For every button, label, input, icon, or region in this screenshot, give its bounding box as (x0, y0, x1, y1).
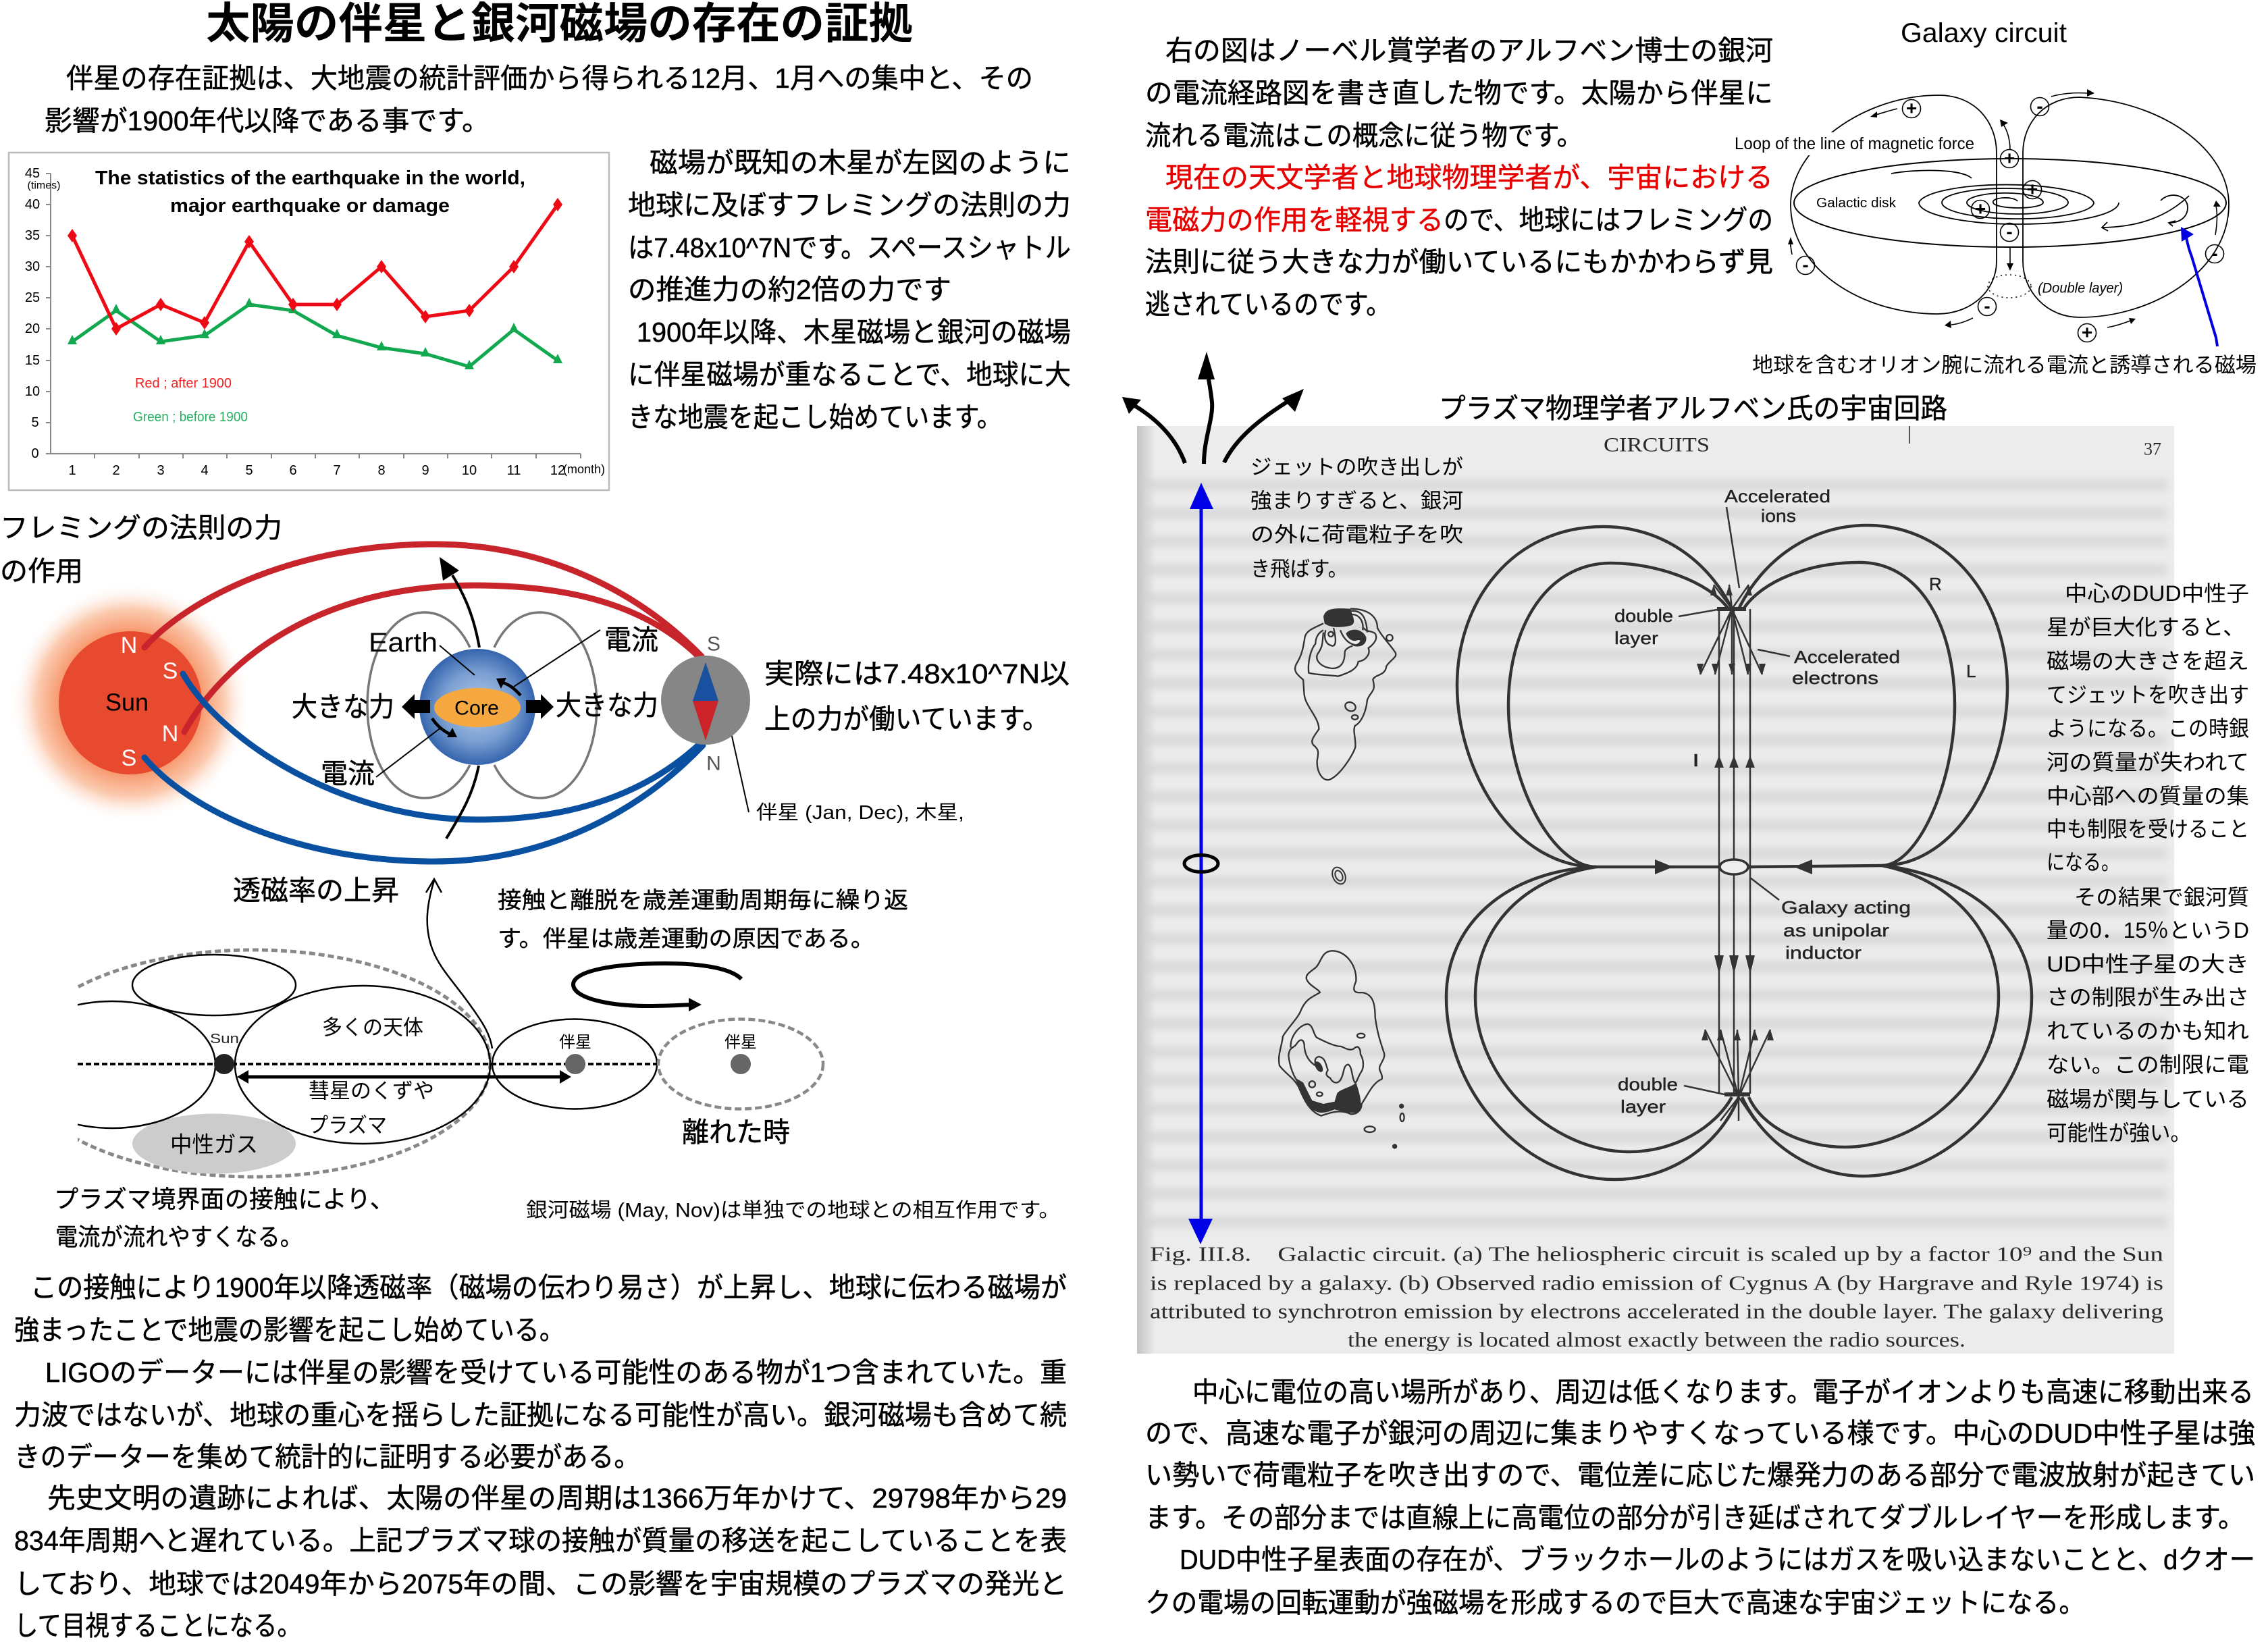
text block: DUD neutron star: さの制限が生み出さ (2047, 985, 2249, 1009)
heading: Alfven cosmic circuit: プラズマ物理学者アルフベン氏の宇宙回路 (1439, 393, 1947, 424)
callout: actual force: 上の力が働いています。 (764, 704, 1049, 735)
x axis labels: 7 (333, 463, 341, 478)
x axis labels: 9 (421, 463, 429, 478)
Sun with glow: N (121, 633, 137, 658)
axis dashed line (78, 1063, 657, 1065)
book header: 37 (2144, 439, 2161, 459)
x axis labels: 10 (462, 463, 477, 478)
double layer dotted ellipse (1988, 275, 2031, 298)
companion dots: 伴星 (559, 1033, 591, 1052)
distance double arrow (237, 1070, 571, 1084)
hand-lettered labels: L (1966, 661, 1976, 681)
figure caption (1150, 1242, 2164, 1352)
x axis labels: (month) (563, 462, 605, 476)
diagram labels: 電流 (321, 758, 375, 789)
callout: actual force: 実際には7.48x10^7N以 (764, 658, 1070, 689)
y axis labels: 40 (25, 197, 40, 212)
text block: lower right paragraphs: ます。その部分までは直線上に高電位の部分が引き延ばされてダブルレイヤーを形成します。 (1145, 1502, 2244, 1533)
figure caption: attributed to synchrotron emission by electrons accelerated in the double layer. The galaxy delivering (1150, 1299, 2163, 1323)
y axis labels: 45 (25, 166, 40, 181)
x axis labels: 2 (112, 463, 120, 478)
axis arrow through Earth (440, 557, 479, 839)
text block: Jupiter magnetic force: 地球に及ぼすフレミングの法則の力 (628, 190, 1071, 221)
text block: lower left paragraphs: 先史文明の遺跡によれば、太陽の伴星の周期は1366万年かけて、29798年から29 (47, 1483, 1067, 1514)
chart legend (133, 376, 248, 425)
heading: Fleming force (0, 512, 282, 587)
diagram: plasma spheres contact (9, 950, 823, 1177)
text block: Jupiter magnetic force: に伴星磁場が重なることで、地球に大 (628, 359, 1071, 390)
plasma lobes (9, 955, 657, 1144)
right lobe (2023, 97, 2229, 317)
diagram labels: 大きな力 (292, 691, 394, 722)
y axis labels: 25 (25, 290, 40, 305)
red magnetic arcs (144, 544, 702, 732)
text block: lower right paragraphs: い勢いで荷電粒子を吹き出すので、電位差に応じた爆発力のある部分で電波放射が起きてい (1145, 1460, 2255, 1491)
Sun dot (210, 1032, 239, 1074)
text block: Alfven current diagram explanation: 法則に従う大きな力が働いているにもかかわらず見 (1145, 246, 1773, 277)
x axis labels: 3 (157, 463, 165, 478)
hand-lettered labels: double (1614, 606, 1673, 626)
text block: Alfven current diagram explanation (1145, 35, 1773, 320)
text block: lower left paragraphs: しており、地球では2049年から2075年の間、この影響を宇宙規模のプラズマの発光と (14, 1568, 1067, 1599)
y axis labels: 30 (25, 259, 40, 274)
hand-lettered labels: I (1693, 750, 1698, 770)
diagram: galaxy circuit: - (2006, 221, 2013, 242)
Sun dot: Sun (210, 1032, 239, 1046)
circuit lobes (1446, 525, 2032, 1179)
green series (68, 298, 562, 369)
text block: Jupiter magnetic force: の推進力の約2倍の力です (628, 274, 951, 305)
radio source contour: upper (1295, 608, 1396, 780)
hand-lettered labels: inductor (1785, 943, 1862, 963)
neutral gas (132, 1114, 296, 1173)
diagram: galaxy circuit: - (2036, 96, 2043, 116)
galactic disk (1794, 159, 2226, 247)
diagram labels: (Double layer) (2038, 281, 2123, 296)
force arrows (402, 694, 554, 719)
text block: lower left paragraphs: 強まったことで地震の影響を起こし始めている。 (14, 1315, 564, 1346)
Sun with glow: Sun (105, 689, 149, 716)
radio source contour: small blob (1329, 865, 1348, 886)
text block: Alfven current diagram explanation: の電流経路図を書き直した物です。太陽から伴星に (1145, 78, 1773, 109)
diagram: galaxy circuit: + (2082, 321, 2092, 343)
caption: plasma boundary contact: 電流が流れやすくなる。 (55, 1223, 302, 1250)
text: contact and separation: す。伴星は歳差運動の原因である。 (498, 926, 874, 952)
text block: DUD neutron star: 可能性が強い。 (2047, 1121, 2191, 1145)
text block: lower right paragraphs: クの電場の回転運動が強磁場を形成するので巨大で高速な宇宙ジェットになる。 (1145, 1587, 2085, 1618)
panel: scanned book figure (1137, 426, 2174, 1354)
Sun with glow: N (162, 721, 178, 747)
inner labels: プラズマ (309, 1114, 387, 1137)
hand-lettered labels: layer (1614, 628, 1658, 648)
text block: Jupiter magnetic force (628, 147, 1071, 433)
text block: DUD neutron star: 中心部への質量の集 (2047, 784, 2249, 808)
text block: lower left paragraphs: 力波ではないが、地球の重心を揺らした証拠になる可能性が高い。銀河磁場も含めて続 (14, 1400, 1067, 1431)
blue magnetic arcs (144, 674, 703, 861)
neutral gas: 中性ガス (170, 1132, 258, 1157)
chart title (95, 167, 525, 217)
text block: lower left paragraphs (14, 1272, 1067, 1641)
companion star with compass: S (707, 633, 720, 655)
text block: DUD neutron star (2047, 581, 2249, 1145)
caption: plasma boundary contact (54, 1186, 394, 1250)
y axis labels: 35 (25, 228, 40, 243)
text block: lower left paragraphs: この接触により1900年以降透磁率（磁場の伝わり易さ）が上昇し、地球に伝わる磁場が (30, 1272, 1067, 1303)
text block: DUD neutron star: 中も制限を受けること (2047, 817, 2249, 841)
diagram labels (292, 625, 658, 789)
diagram: galaxy circuit: - (2211, 243, 2218, 263)
text block: jet blow-out: き飛ばす。 (1250, 558, 1348, 581)
x axis labels: 5 (245, 463, 253, 478)
text block: jet blow-out (1250, 455, 1463, 581)
y axis labels: 0 (31, 446, 39, 461)
leader lines (376, 630, 749, 812)
galaxy hub ellipse (1720, 859, 1748, 874)
hand-lettered labels: electrons (1792, 668, 1878, 688)
circuit arrowheads and hub (1655, 585, 1812, 1096)
red series (68, 198, 562, 336)
chart title: major earthquake or damage (170, 195, 450, 217)
text block: lower left paragraphs: きのデーターを集めて統計的に証明する必要がある。 (14, 1441, 640, 1473)
Earth (419, 649, 535, 765)
label: Orion arm: 地球を含むオリオン腕に流れる電流と誘導される磁場 (1752, 354, 2257, 377)
text: contact and separation: 接触と離脱を歳差運動周期毎に繰り返 (498, 888, 908, 913)
inner labels (309, 1015, 434, 1137)
Earth: Core (454, 697, 499, 720)
diagram: galaxy circuit (1733, 89, 2229, 346)
x axis labels: 11 (507, 463, 521, 478)
x axis labels (68, 462, 605, 478)
title: 太陽の伴星と銀河磁場の存在の証拠 (206, 0, 913, 48)
y axis labels (25, 166, 60, 461)
current direction arrows (1791, 93, 2217, 327)
spiral arms (1891, 170, 2189, 231)
line chart: earthquake statistics (9, 153, 609, 490)
x axis labels: 4 (201, 463, 209, 478)
callout: actual force (764, 658, 1070, 735)
hand-lettered labels (1614, 486, 1976, 1117)
intro text block (45, 63, 1033, 136)
diagram labels: Earth (369, 628, 438, 658)
book header: CIRCUITS (1604, 433, 1710, 456)
chart legend: Red ; after 1900 (135, 376, 232, 391)
text block: lower left paragraphs: LIGOのデーターには伴星の影響を受けている可能性のある物が1つ含まれていた。重 (45, 1357, 1067, 1388)
label: when separated: 離れた時 (682, 1117, 790, 1148)
text block: DUD neutron star: てジェットを吹き出す (2047, 683, 2249, 707)
text block: Alfven current diagram explanation: ので、地球にはフレミングの (1444, 205, 1773, 236)
text block: DUD neutron star: その結果で銀河質 (2074, 885, 2249, 909)
label: permeability rise: 透磁率の上昇 (233, 875, 399, 906)
intro text block: 影響が1900年代以降である事です。 (45, 105, 490, 136)
y axis labels: 15 (25, 353, 40, 368)
book header (1604, 426, 2161, 459)
text block: DUD neutron star: れているのかも知れ (2047, 1019, 2249, 1043)
text block: DUD neutron star: ない。この制限に電 (2047, 1053, 2249, 1077)
text block: Alfven current diagram explanation: 電磁力の作用を軽視する (1145, 205, 1444, 236)
diagram labels: Loop of the line of magnetic force (1735, 134, 1974, 153)
diagram: galaxy circuit: + (1906, 97, 1917, 119)
hand-lettered labels: Galaxy acting (1781, 897, 1911, 918)
companion dots: 伴星 (724, 1033, 757, 1052)
label: companion star months: 伴星 (Jan, Dec), 木星, (756, 801, 964, 824)
charge markers (1796, 97, 2224, 342)
figure caption: the energy is located almost exactly between the radio sources. (1348, 1327, 1966, 1352)
y axis labels: 10 (25, 384, 40, 399)
diagram labels: 電流 (604, 625, 658, 656)
text block: Alfven current diagram explanation: 現在の天文学者と地球物理学者が、宇宙における (1165, 162, 1773, 193)
y axis labels: (times) (28, 180, 60, 192)
Sun with glow (10, 583, 250, 823)
diagram: Fleming force between Sun, Earth and companion (10, 544, 750, 861)
blue pointer arrow (2181, 227, 2217, 346)
black ring on axis (1184, 855, 1218, 872)
companion dots (559, 1033, 757, 1074)
inner labels: 彗星のくずや (309, 1079, 434, 1103)
text block: DUD neutron star: 河の質量が失われて (2047, 750, 2249, 774)
hand-lettered labels: R (1929, 574, 1942, 594)
Sun with glow: S (122, 745, 136, 771)
text block: lower left paragraphs: 834年周期へと遅れている。上記プラズマ球の接触が質量の移送を起こしていることを表 (14, 1525, 1067, 1556)
intro text block: 伴星の存在証拠は、大地震の統計評価から得られる12月、1月への集中と、その (66, 63, 1033, 94)
jet arrows (1122, 352, 1304, 464)
text block: lower left paragraphs: して目視することになる。 (14, 1610, 301, 1641)
text block: jet blow-out: 強まりすぎると、銀河 (1250, 489, 1463, 513)
x axis labels: 6 (289, 463, 297, 478)
hand-lettered labels: Accelerated (1724, 486, 1830, 506)
rotation arrow (573, 963, 741, 1011)
heading: Fleming force: フレミングの法則の力 (0, 512, 282, 543)
diagram: galaxy circuit: - (1984, 296, 1990, 316)
text block: DUD neutron star: 星が巨大化すると、 (2047, 615, 2245, 639)
current arrows (432, 678, 521, 737)
Sun with glow: S (163, 658, 178, 684)
hand-lettered labels: double (1618, 1074, 1678, 1094)
central current lines (1679, 507, 1790, 1121)
arrow: permeability (426, 879, 492, 1049)
figure caption: Fig. III.8. Galactic circuit. (a) The heliospheric circuit is scaled up by a factor 10⁹ and the Sun (1150, 1242, 2164, 1265)
y axis labels: 5 (31, 415, 39, 430)
blue double arrow: jet axis (1188, 483, 1213, 1244)
hand-lettered labels: as unipolar (1783, 920, 1889, 940)
heading: Galaxy circuit: Galaxy circuit (1901, 18, 2067, 48)
companion star with compass (661, 633, 750, 775)
text block: DUD neutron star: UD中性子星の大き (2047, 952, 2249, 976)
diagram: galaxy circuit: - (1802, 254, 1809, 275)
hand-lettered labels: layer (1620, 1096, 1666, 1117)
left lobe (1791, 95, 1997, 314)
text block: Jupiter magnetic force: は7.48x10^7Nです。スペースシャトル (628, 232, 1071, 263)
text block: Alfven current diagram explanation: 右の図はノーベル賞学者のアルフベン博士の銀河 (1165, 35, 1773, 66)
text block: jet blow-out: ジェットの吹き出しが (1250, 455, 1463, 479)
caption: galactic field: 銀河磁場 (May, Nov)は単独での地球との相互作用です。 (526, 1199, 1060, 1222)
diagram labels: Galactic disk (1816, 196, 1897, 211)
text block: Jupiter magnetic force: 磁場が既知の木星が左図のように (650, 147, 1071, 178)
chart legend: Green ; before 1900 (133, 410, 248, 425)
field loops around Earth (367, 612, 597, 798)
text block: lower right paragraphs (1145, 1377, 2255, 1618)
hand-lettered labels: Accelerated (1794, 647, 1900, 667)
x axis labels: 1 (68, 463, 76, 478)
text block: lower right paragraphs: ので、高速な電子が銀河の周辺に集まりやすくなっている様です。中心のDUD中性子星は強 (1145, 1418, 2255, 1449)
hand-lettered labels: ions (1761, 506, 1796, 526)
chart title: The statistics of the earthquake in the world, (95, 167, 525, 189)
diagram: galaxy circuit: + (2004, 147, 2015, 169)
x axis labels: 8 (377, 463, 386, 478)
text block: DUD neutron star: になる。 (2047, 850, 2119, 874)
text block: Alfven current diagram explanation: 流れる電流はこの概念に従う物です。 (1145, 120, 1583, 151)
caption: plasma boundary contact: プラズマ境界面の接触により、 (54, 1186, 394, 1213)
diagram labels: 大きな力 (556, 690, 658, 721)
text block: DUD neutron star: 磁場の大きさを超え (2047, 649, 2249, 673)
separated companion dashed circle (658, 1019, 823, 1109)
text block: Jupiter magnetic force: きな地震を起こし始めています。 (628, 402, 1002, 433)
text block: DUD neutron star: ようになる。この時銀 (2047, 716, 2249, 741)
inner labels: 多くの天体 (322, 1015, 423, 1040)
diagram: galaxy circuit: + (2027, 178, 2038, 200)
heliosphere dashed boundary (78, 948, 492, 1179)
figure caption: is replaced by a galaxy. (b) Observed radio emission of Cygnus A (by Hargrave and Ryle 1974) is (1150, 1271, 2163, 1295)
text block: Alfven current diagram explanation: 逃されているのです。 (1145, 289, 1391, 320)
y axis labels: 20 (25, 321, 40, 336)
x axis labels: 12 (550, 463, 565, 478)
radio source contour: lower (1279, 951, 1404, 1149)
diagram: galaxy circuit: + (1975, 198, 1986, 219)
text block: Jupiter magnetic force: 1900年以降、木星磁場と銀河の磁場 (637, 317, 1071, 348)
text block: DUD neutron star: 中心のDUD中性子 (2065, 581, 2249, 606)
text block: DUD neutron star: 磁場が関与している (2047, 1087, 2249, 1111)
text block: DUD neutron star: 量の0．15％というD (2047, 918, 2249, 943)
text block: jet blow-out: の外に荷電粒子を吹 (1250, 523, 1463, 547)
text: contact and separation (498, 888, 908, 952)
diagram labels (1733, 132, 2123, 296)
heading: Fleming force: の作用 (0, 556, 83, 587)
companion star with compass: N (706, 752, 721, 775)
chart axes (46, 174, 581, 458)
